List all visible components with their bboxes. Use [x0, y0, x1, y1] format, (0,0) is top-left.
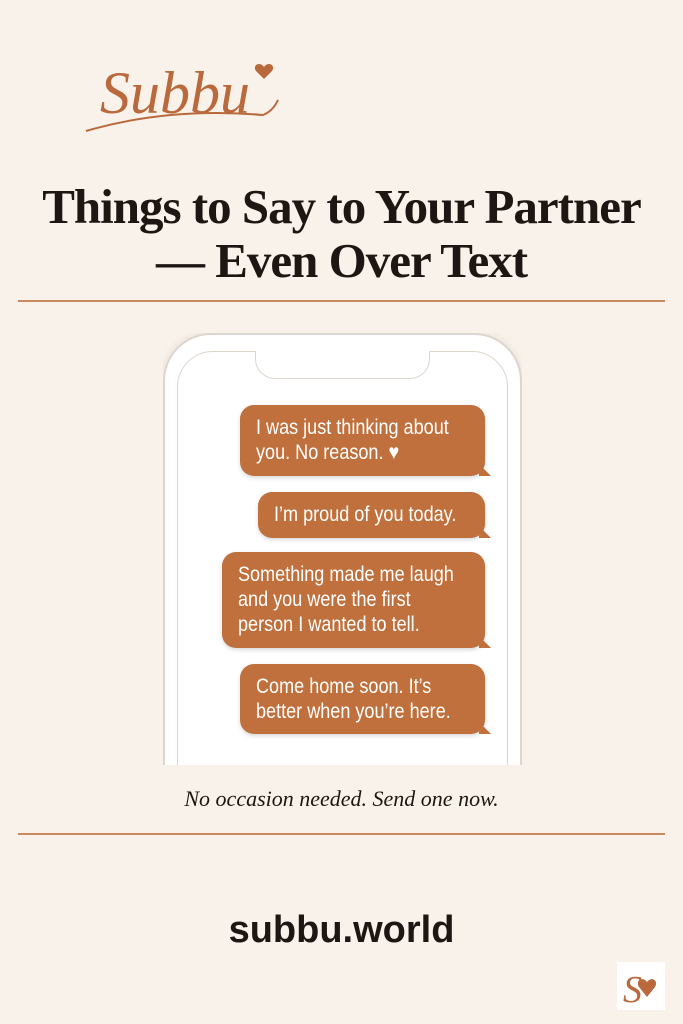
title: Things to Say to Your Partner	[42, 179, 641, 234]
phone mockup	[163, 333, 522, 765]
tagline: No occasion needed. Send one now.	[184, 786, 499, 811]
icon: logo badge: S	[623, 969, 642, 1010]
bubble 4: better when you’re here.	[256, 700, 451, 723]
icon: logo badge	[617, 962, 665, 1010]
bubble 1	[240, 405, 485, 476]
bubble 2: I’m proud of you today.	[274, 503, 456, 526]
notch	[255, 351, 430, 379]
bubble 4: Come home soon. It’s	[256, 675, 431, 698]
bubble 3: and you were the first	[238, 588, 411, 611]
bubble 3: person I wanted to tell.	[238, 613, 420, 636]
website: subbu.world	[229, 909, 454, 951]
bubble 3	[222, 552, 485, 648]
title	[42, 179, 641, 288]
bubble 1: I was just thinking about	[256, 416, 449, 439]
title: — Even Over Text	[156, 233, 527, 288]
bubble 1: you. No reason. ♥	[256, 441, 399, 464]
bubble 4	[240, 664, 485, 734]
bubble 3: Something made me laugh	[238, 563, 454, 586]
bubble 2	[258, 492, 485, 538]
logo: Subbu script: Subbu	[100, 60, 250, 126]
